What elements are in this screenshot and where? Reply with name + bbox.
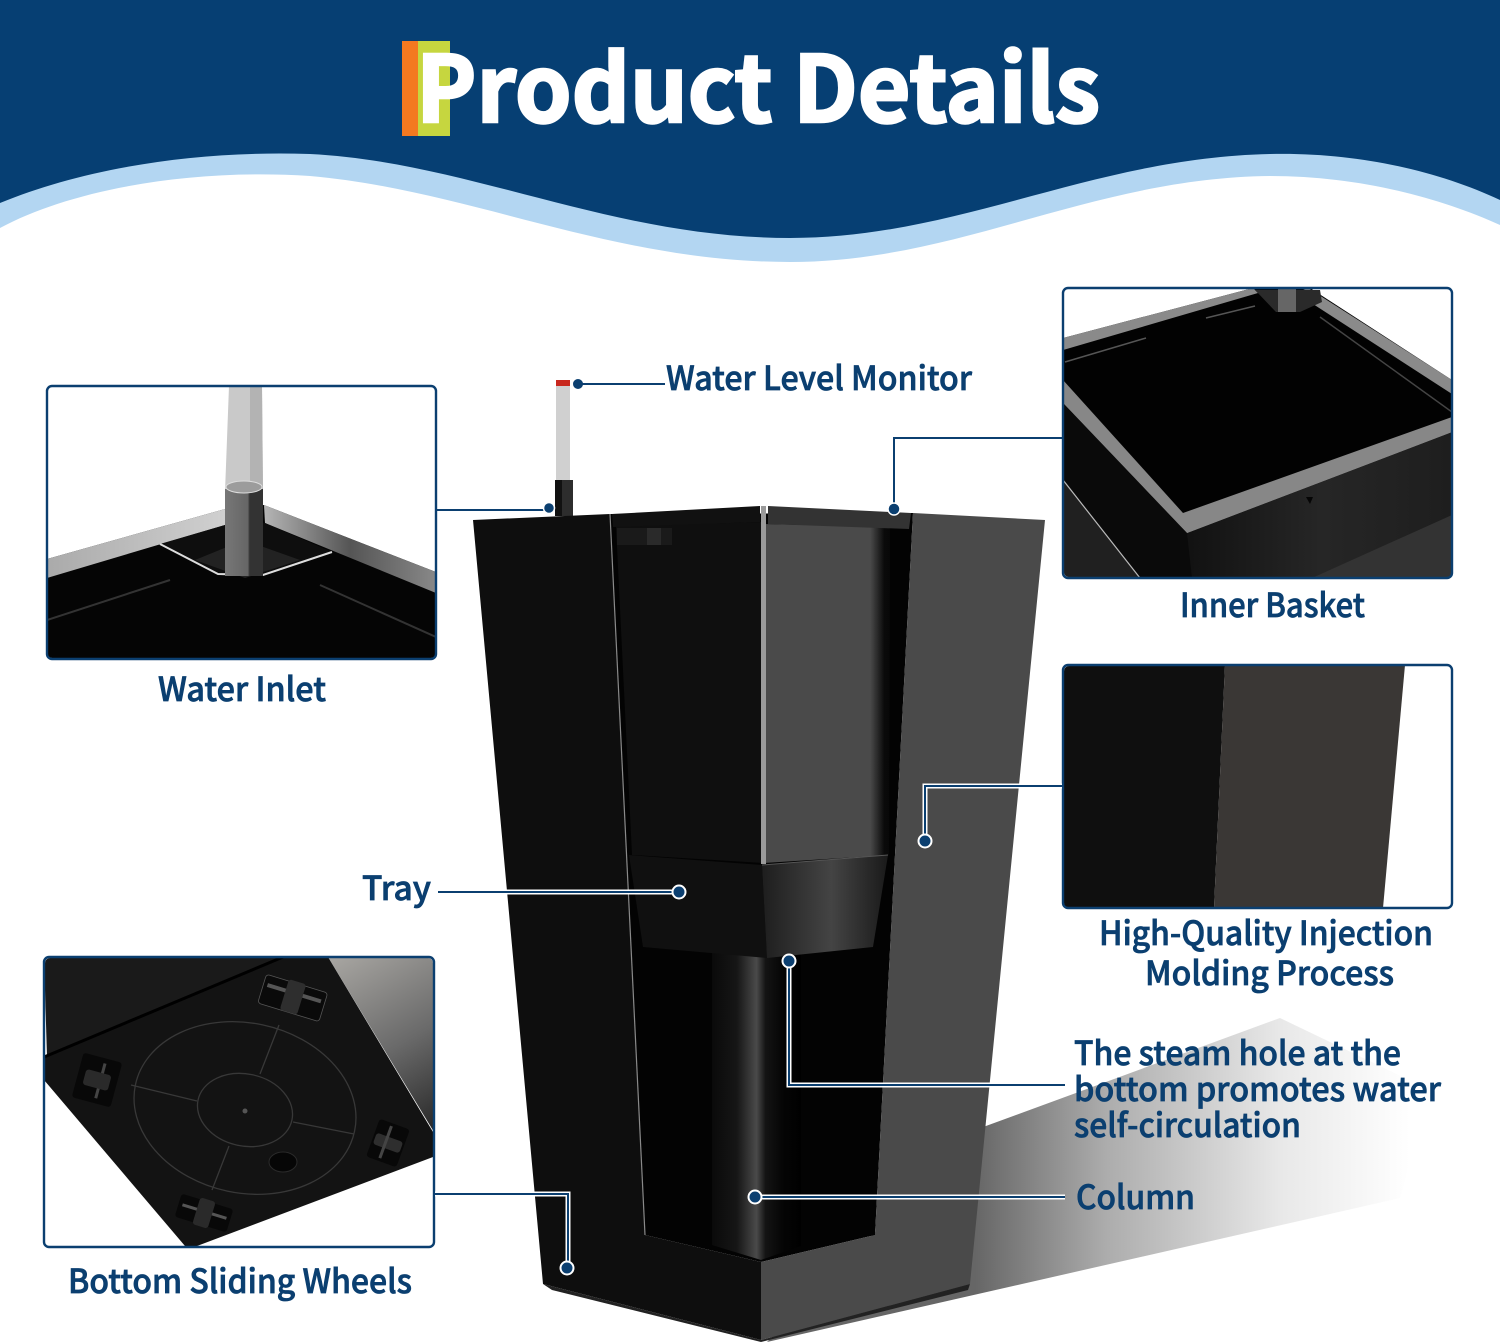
wheel — [176, 1194, 232, 1232]
light blue wave band — [0, 150, 1500, 262]
outer shell right face — [761, 513, 1045, 1340]
wheel — [366, 1119, 410, 1167]
shell edge highlights — [610, 514, 645, 1235]
label: column: Column — [1076, 1171, 1195, 1219]
drain plug — [269, 1152, 297, 1172]
callout: steam hole — [782, 954, 1065, 1085]
header banner — [0, 0, 1500, 262]
wheel — [72, 1053, 122, 1107]
label: water inlet: Water Inlet — [158, 663, 326, 711]
panel: inner basket — [1063, 288, 1452, 578]
inner opening backing — [610, 513, 913, 1262]
floor shadow — [767, 1018, 1430, 1342]
label: steam hole: The steam hole at the — [1074, 1027, 1401, 1075]
panel: injection molding — [1063, 665, 1452, 908]
inner basket — [612, 506, 911, 864]
base — [543, 1284, 970, 1342]
callout: tray — [438, 886, 686, 898]
column — [712, 950, 801, 1260]
title accent: orange bar — [402, 41, 418, 136]
floor — [47, 505, 436, 660]
callout: water level monitor — [573, 379, 665, 389]
label: tray: Tray — [362, 862, 431, 910]
clear tube — [225, 386, 263, 492]
tray — [629, 855, 888, 958]
basket interior — [1063, 288, 1452, 515]
callout: injection molding — [918, 786, 1062, 848]
panel: bottom sliding wheels — [44, 957, 434, 1247]
title accent: lime bar — [418, 41, 450, 136]
label: steam hole — [1074, 1027, 1441, 1147]
callout: column — [748, 1190, 1065, 1204]
water level monitor tube — [555, 380, 573, 516]
body — [1063, 403, 1452, 578]
base plate — [44, 957, 433, 1246]
callout: water inlet — [437, 502, 554, 514]
planter cutaway — [473, 380, 1045, 1342]
label: water level monitor: Water Level Monitor — [666, 352, 972, 400]
front rim — [1063, 380, 1452, 533]
tube — [225, 489, 263, 576]
label: steam hole: self-circulation — [1074, 1099, 1301, 1147]
label: injection molding — [1099, 907, 1433, 995]
callout: inner basket — [888, 438, 1062, 515]
label: steam hole: bottom promotes water — [1074, 1063, 1441, 1111]
panel: water inlet — [47, 386, 436, 660]
title text: Product Details — [416, 16, 1100, 149]
callout: bottom sliding wheels — [435, 1194, 574, 1274]
label: bottom sliding wheels: Bottom Sliding Wheels — [68, 1255, 412, 1303]
label: injection molding: High-Quality Injection — [1099, 907, 1433, 955]
base plate rings — [131, 1021, 357, 1195]
label: inner basket: Inner Basket — [1180, 579, 1365, 627]
title — [402, 16, 1100, 149]
navy wave — [0, 0, 1500, 238]
label: injection molding: Molding Process — [1145, 947, 1394, 995]
outer shell left face — [473, 514, 761, 1340]
wheel — [258, 972, 328, 1022]
